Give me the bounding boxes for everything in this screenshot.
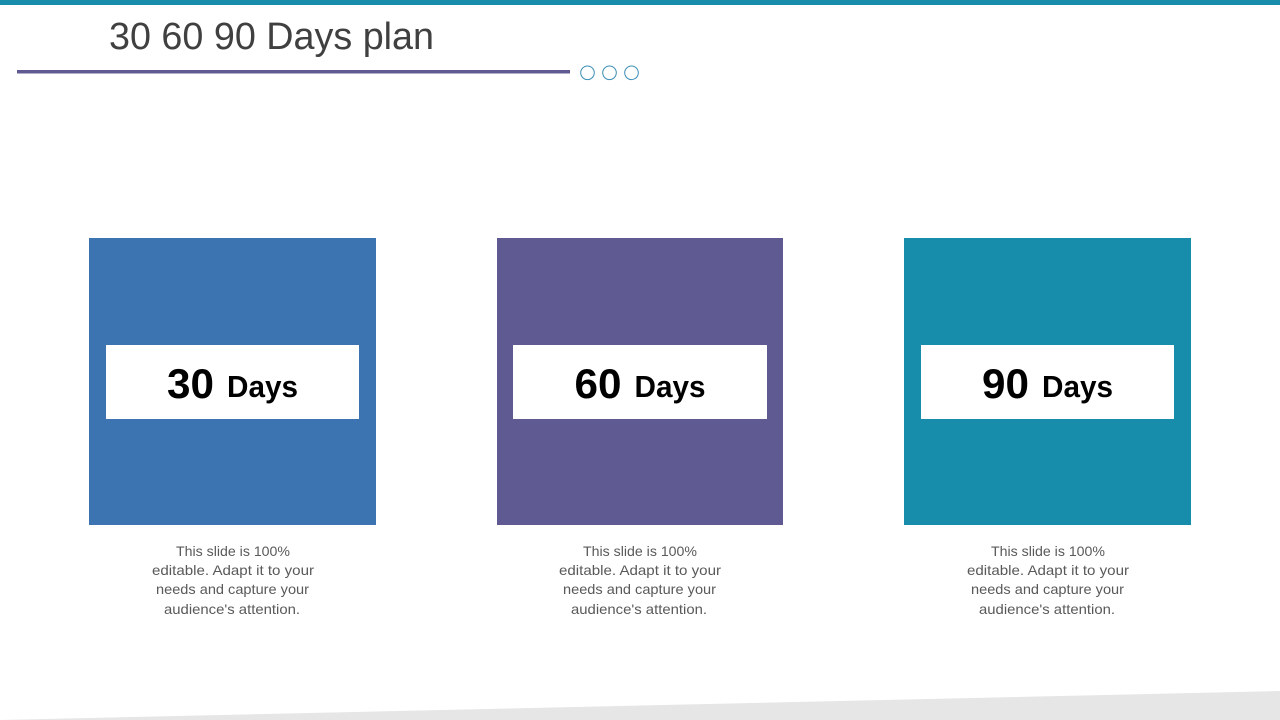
title underline <box>17 70 570 74</box>
description: 60 days <box>559 544 722 617</box>
description: 30 days: editable. Adapt it to your <box>152 563 315 578</box>
description: 30 days: This slide is 100% <box>176 544 290 559</box>
description: 90 days: This slide is 100% <box>991 544 1105 559</box>
description: 90 days: audience's attention. <box>979 602 1115 617</box>
panel: 60 days <box>497 238 783 525</box>
label: 90 days <box>982 360 1113 407</box>
description: 60 days: needs and capture your <box>563 582 716 597</box>
label box: 30 days <box>106 345 359 419</box>
label box: 90 days <box>921 345 1174 419</box>
description: 60 days: audience's attention. <box>571 602 707 617</box>
panel: 90 days <box>904 238 1191 525</box>
description: 90 days <box>967 544 1130 617</box>
description: 90 days: editable. Adapt it to your <box>967 563 1130 578</box>
label: 90 days: 90 <box>982 360 1029 407</box>
description: 60 days: This slide is 100% <box>583 544 697 559</box>
panel: 30 days <box>89 238 376 525</box>
title: 30 60 90 Days plan <box>109 16 434 58</box>
label: 30 days: 30 <box>167 360 214 407</box>
description: 30 days: needs and capture your <box>156 582 309 597</box>
label: 60 days: Days <box>634 369 706 404</box>
label: 60 days: 60 <box>574 360 622 407</box>
label box: 60 days <box>513 345 767 419</box>
label: 60 days <box>574 360 706 407</box>
description: 30 days: audience's attention. <box>164 602 300 617</box>
bottom grey wedge <box>0 691 1280 720</box>
square: 30 days <box>89 238 376 525</box>
square: 90 days <box>904 238 1191 525</box>
decorative circles <box>581 66 638 80</box>
label: 30 days <box>167 360 298 407</box>
description: 90 days: needs and capture your <box>971 582 1124 597</box>
top accent bar <box>0 0 1280 5</box>
description: 60 days: editable. Adapt it to your <box>559 563 722 578</box>
label: 90 days: Days <box>1042 369 1113 404</box>
label: 30 days: Days <box>227 369 298 404</box>
description: 30 days <box>152 544 315 617</box>
square: 60 days <box>497 238 783 525</box>
